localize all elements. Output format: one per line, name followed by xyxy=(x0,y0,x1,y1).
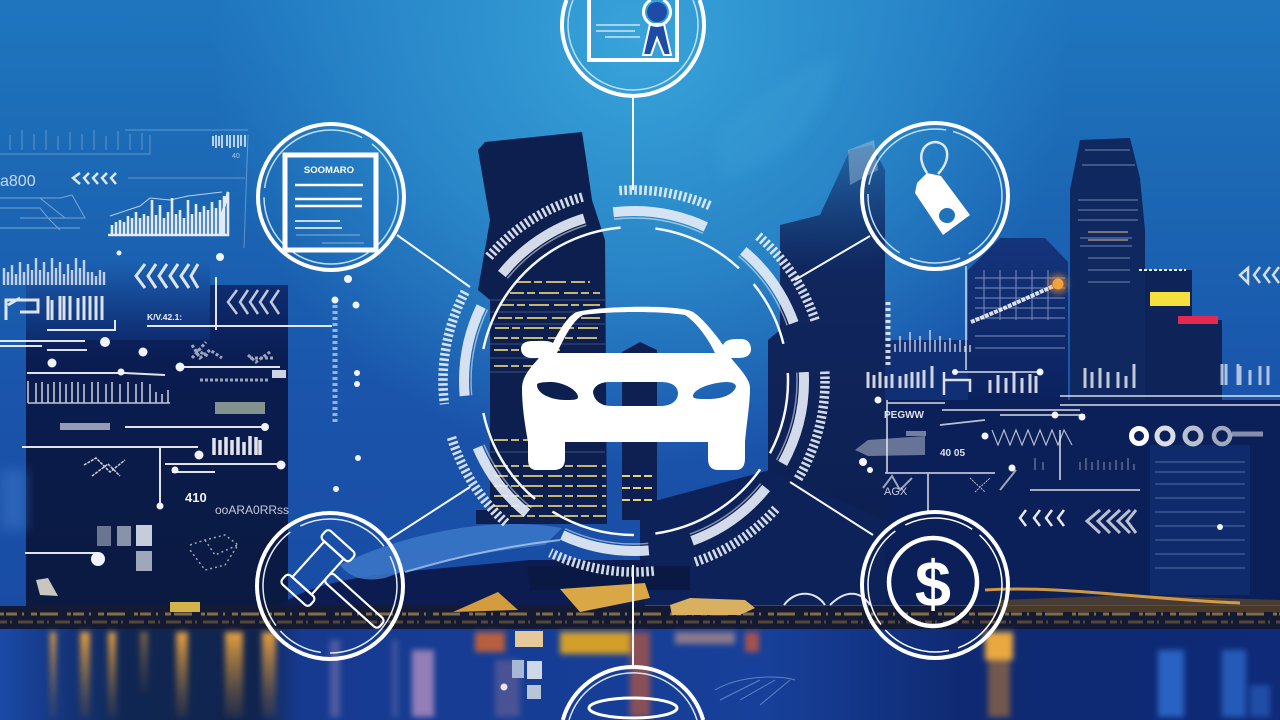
icon circle: coin stack (bottom) xyxy=(563,667,703,720)
dotted constellation xyxy=(190,535,238,570)
icon: car front view xyxy=(521,307,751,470)
central HUD ring xyxy=(443,190,825,572)
chevrons row 1 xyxy=(73,173,116,184)
HUD markers: right: PEGWW xyxy=(884,410,925,421)
building: pale glass tower xyxy=(1150,445,1250,595)
building: central tower xyxy=(476,132,607,524)
top right mini bars xyxy=(213,135,245,148)
tall tower floor lights xyxy=(1078,150,1138,282)
icon circle: document xyxy=(258,124,404,270)
tick ring xyxy=(443,190,825,572)
bar chart top xyxy=(108,192,228,235)
HUD data overlay: left: 40 xyxy=(232,153,240,160)
icon circle: price tag xyxy=(862,123,1008,269)
icon circle: gavel xyxy=(257,513,405,659)
building: right group mid block xyxy=(968,238,1068,600)
chevrons lower right 1 xyxy=(1020,510,1064,526)
building: lower band xyxy=(885,340,1280,605)
icon circle: dollar xyxy=(862,512,1008,658)
thin ring xyxy=(480,227,788,535)
comb bars xyxy=(28,381,170,403)
square swatches xyxy=(97,525,152,571)
HUD data overlay: left xyxy=(0,130,335,570)
lined bars right xyxy=(868,366,932,388)
circuit trace xyxy=(0,195,85,230)
connector lines to icons xyxy=(388,97,873,665)
art museum roof xyxy=(272,524,690,610)
connector network right xyxy=(885,372,1280,512)
tag body xyxy=(915,173,970,235)
skyline buildings xyxy=(0,132,1280,612)
ring markers xyxy=(1132,428,1263,444)
wave bars xyxy=(4,258,104,285)
rising line chart xyxy=(971,285,1056,322)
waterfront lights xyxy=(0,578,1280,630)
icon circle: certificate xyxy=(562,0,704,96)
rosette seal xyxy=(643,24,671,55)
bar chart mid xyxy=(214,436,260,455)
building: tall tower xyxy=(1070,138,1145,600)
chevrons right top xyxy=(1240,267,1279,283)
document heading: SOOMARO xyxy=(304,165,354,176)
icon circle: dollar: $ xyxy=(915,547,951,620)
scribble data xyxy=(192,342,275,380)
faint top bars xyxy=(0,130,248,248)
chevrons lower right 2 xyxy=(1087,510,1136,533)
building: right low tower xyxy=(1145,270,1222,600)
neon signs xyxy=(1150,292,1190,306)
document lines xyxy=(295,185,363,206)
orange signal glow xyxy=(1048,274,1068,294)
label text left top: a800 xyxy=(0,173,36,190)
mid block grid lights xyxy=(975,270,1065,348)
chevrons row 3 xyxy=(228,290,279,314)
building: left block xyxy=(26,285,288,612)
HUD markers: right: 40 05 xyxy=(940,448,965,459)
bars under wave xyxy=(6,296,102,320)
chevrons row 2 xyxy=(136,264,198,288)
readout text: K/V.42.1: xyxy=(147,312,182,322)
thick arc ring xyxy=(464,211,804,551)
building: right of centre tower xyxy=(768,145,885,560)
HUD markers: right: AGX xyxy=(884,486,908,498)
building: small tower behind car xyxy=(622,342,657,520)
vertical dotted column xyxy=(332,305,338,422)
HUD markers and swatches: left xyxy=(48,250,361,571)
HUD markers and swatches: left: ooARA0RRss xyxy=(215,503,289,517)
wave bars right xyxy=(895,330,970,352)
HUD data overlay: right xyxy=(868,266,1280,533)
label text: 410 xyxy=(185,490,207,505)
harbour water with reflections xyxy=(0,629,1280,720)
data scribble xyxy=(883,470,1016,490)
wavy bars dark band xyxy=(992,430,1072,445)
central tower window lights xyxy=(494,282,606,516)
HUD markers: right xyxy=(855,368,1223,530)
connector network xyxy=(0,277,332,553)
